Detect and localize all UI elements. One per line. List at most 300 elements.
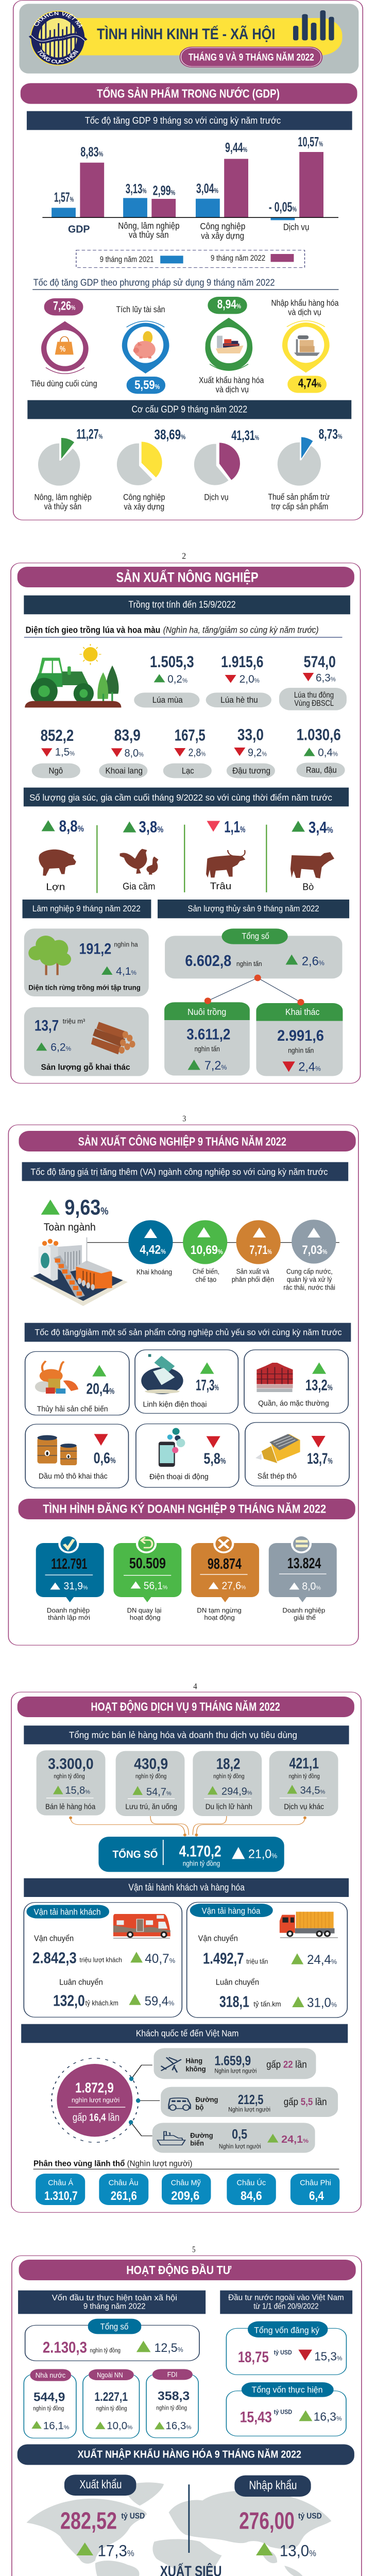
card: new enterprises: thành lập mới bbox=[48, 1614, 90, 1621]
card: freight transport: Vận tải hàng hóa bbox=[202, 1906, 261, 1916]
pie chart: industry share bbox=[117, 427, 186, 512]
card: total investment bbox=[25, 2319, 199, 2361]
stat: main-season rice bbox=[134, 653, 199, 707]
pie chart: taxes share: 8,73% bbox=[319, 427, 343, 442]
card: state sector bbox=[24, 2369, 76, 2438]
card: processed seafood bbox=[25, 1351, 129, 1415]
card: Africa bbox=[290, 2174, 339, 2205]
bar chart: GDP growth: Công nghiệp bbox=[200, 221, 245, 231]
ring: imports: 4,74% bbox=[298, 377, 321, 390]
card: returning enterprises: DN quay lại bbox=[127, 1607, 162, 1614]
icon: check mark bbox=[64, 1539, 74, 1548]
card: other services: 34,5% bbox=[300, 1785, 325, 1797]
stat: water and waste bbox=[283, 1219, 336, 1292]
callout: total visitors circle: nghìn lượt người bbox=[72, 2096, 119, 2104]
card: non-state sector: 10,0% bbox=[107, 2420, 132, 2432]
card: non-state sector: nghìn tỷ đồng bbox=[96, 2405, 127, 2412]
subheading: foreign investment: từ 1/1 đến 20/9/2022 bbox=[253, 2302, 319, 2311]
card: Americas bbox=[162, 2174, 211, 2205]
subheading: GDP structure: Cơ cấu GDP 9 tháng năm 2022 bbox=[132, 403, 247, 415]
card: by air: Nghìn lượt người bbox=[214, 2067, 257, 2075]
card: crude steel: 13,7% bbox=[307, 1450, 333, 1467]
card: travel: nghìn tỷ đồng bbox=[213, 1773, 245, 1780]
connector: fisheries tree bbox=[204, 975, 304, 1006]
ring: final consumption bbox=[30, 298, 97, 388]
stat: buffalo: Trâu bbox=[210, 881, 231, 891]
panel: industry bbox=[8, 1125, 358, 1645]
card: Europe: 261,6 bbox=[111, 2189, 137, 2203]
stat: peanut: 167,5 bbox=[175, 726, 206, 744]
icon: ship bbox=[158, 2131, 185, 2145]
stat: peanut: 2,8% bbox=[188, 746, 206, 758]
pie chart: services share: 41,31% bbox=[231, 428, 259, 443]
card: mobile phones: 5,8% bbox=[203, 1450, 226, 1467]
card: Australia bbox=[227, 2174, 276, 2205]
stat: peanut bbox=[163, 726, 212, 778]
card: by road: Nghìn lượt người bbox=[228, 2106, 270, 2113]
card: by sea: 24,1% bbox=[281, 2134, 309, 2145]
stat: manufacturing bbox=[183, 1220, 227, 1283]
card: freight transport: tỷ tấn.km bbox=[253, 2000, 281, 2008]
subheading: fisheries bbox=[158, 900, 349, 918]
bar chart: GDP growth: 2,99% bbox=[153, 183, 175, 198]
card: crude steel: Sắt thép thô bbox=[258, 1471, 297, 1480]
card: disbursed FDI: Tổng vốn thực hiện bbox=[252, 2385, 323, 2395]
page number 5: 5 bbox=[192, 2244, 196, 2255]
card: total fisheries: 2,6% bbox=[302, 955, 324, 968]
card: dissolved enterprises bbox=[269, 1534, 337, 1621]
card: accommodation bbox=[116, 1751, 184, 1816]
stat: corn bbox=[32, 726, 80, 778]
card: capture fisheries: 2,4% bbox=[298, 1060, 321, 1074]
icon: oil barrels bbox=[38, 1435, 77, 1465]
card: freight transport: 24,4% bbox=[307, 1953, 337, 1967]
card: disbursed FDI: 16,3% bbox=[314, 2410, 342, 2423]
card: passenger transport: 59,4% bbox=[145, 1994, 174, 2008]
stat: exports: 17,3% bbox=[98, 2542, 134, 2560]
icon: buffalo bbox=[206, 850, 245, 877]
legend: 9 tháng năm 2021 bbox=[100, 255, 154, 264]
bar chart: GDP growth: 10,57% bbox=[298, 134, 323, 149]
stat: pigs: Lợn bbox=[46, 882, 65, 892]
bar chart: GDP growth: 9,44% bbox=[225, 140, 247, 155]
card: passenger transport: Luân chuyển bbox=[59, 1978, 103, 1987]
card: accommodation: 430,9 bbox=[134, 1755, 168, 1772]
subheading: forestry: Lâm nghiệp 9 tháng năm 2022 bbox=[32, 904, 141, 913]
card: freight transport bbox=[187, 1902, 347, 2018]
card: other services: Dịch vụ khác bbox=[284, 1802, 324, 1811]
card: disbursed FDI: tỷ USD bbox=[274, 2409, 292, 2416]
stat: mining: 4,42% bbox=[140, 1243, 166, 1257]
stat: whole industry bbox=[41, 1195, 109, 1233]
card: passenger transport: Vận tải hành khách bbox=[34, 1908, 101, 1917]
text: sown area bbox=[24, 625, 342, 638]
stat: autumn-winter rice: Lúa thu đông bbox=[294, 690, 334, 699]
bar chart: GDP growth: 8,83% bbox=[80, 144, 103, 159]
card: FDI sector bbox=[146, 2369, 198, 2438]
card: accommodation: Lưu trú, ăn uống bbox=[125, 1802, 177, 1811]
heading: investment: HOẠT ĐỘNG ĐẦU TƯ bbox=[126, 2263, 231, 2277]
pie chart: agriculture share: 11,27% bbox=[76, 427, 103, 442]
icon: truck bbox=[280, 1912, 338, 1938]
card: total fisheries: nghìn tấn bbox=[236, 960, 262, 968]
card: returning enterprises: 50.509 bbox=[129, 1555, 166, 1572]
pie chart: services share: Dịch vụ bbox=[204, 493, 229, 502]
heading: agriculture bbox=[18, 567, 354, 587]
card: by air: 1.659,9 bbox=[214, 2053, 251, 2068]
card: passenger transport: triệu lượt khách bbox=[79, 1956, 122, 1964]
card: phone components: Linh kiện điện thoại bbox=[143, 1400, 207, 1409]
stat: sweet potato: Khoai lang bbox=[105, 767, 143, 776]
subheading: social investment bbox=[18, 2291, 206, 2314]
stat: summer-autumn rice bbox=[206, 653, 271, 707]
stat: exports: Xuất khẩu bbox=[79, 2478, 122, 2491]
text: by region: Phân theo vùng lãnh thổ bbox=[33, 2159, 125, 2168]
subheading: GDP growth bbox=[27, 111, 352, 130]
card: total fisheries: Tổng số bbox=[242, 932, 269, 941]
card: aquaculture bbox=[164, 1002, 250, 1076]
stat: sweet potato: 8,0% bbox=[124, 747, 144, 759]
card: crude oil: Dầu mỏ thô khai thác bbox=[39, 1471, 108, 1480]
stat: exports bbox=[60, 2475, 145, 2560]
card: total retail: 21,0% bbox=[248, 1848, 277, 1861]
card: by road: bộ bbox=[196, 2104, 203, 2111]
card: other services: nghìn tỷ đồng bbox=[289, 1773, 320, 1780]
card: retail goods: nghìn tỷ đồng bbox=[54, 1773, 85, 1780]
card: total investment: Tổng số bbox=[100, 2323, 128, 2332]
arrows: connectors to total bbox=[70, 1816, 306, 1836]
ring: exports: Xuất khẩu hàng hóa bbox=[199, 376, 264, 385]
card: timber: 6,2% bbox=[50, 1041, 71, 1053]
card: suspended enterprises: 27,6% bbox=[222, 1580, 246, 1591]
stat: summer-autumn rice: 1.915,6 bbox=[221, 653, 263, 671]
card: suspended enterprises bbox=[191, 1534, 259, 1621]
pie chart: services share bbox=[194, 428, 259, 502]
stat: main-season rice: 0,2% bbox=[167, 672, 187, 685]
ring: exports bbox=[199, 297, 264, 395]
card: FDI sector: FDI bbox=[167, 2370, 177, 2379]
stat: peanut: Lạc bbox=[182, 767, 194, 776]
stat: main-season rice: Lúa mùa bbox=[152, 696, 183, 705]
heading: trade bbox=[18, 2444, 354, 2465]
stat: summer-autumn rice: Lúa hè thu bbox=[220, 696, 258, 705]
card: disbursed FDI: 15,43 bbox=[240, 2409, 272, 2426]
subheading: social investment: 9 tháng năm 2022 bbox=[83, 2302, 146, 2311]
stat: water and waste: rác thải, nước thải bbox=[283, 1283, 335, 1292]
heading: agriculture: SẢN XUẤT NÔNG NGHIỆP bbox=[116, 569, 259, 585]
card: disbursed FDI bbox=[226, 2382, 346, 2436]
stat: main-season rice: 1.505,3 bbox=[150, 653, 194, 671]
pie chart: industry share: Công nghiệp bbox=[123, 493, 165, 502]
card: passenger transport: 2.842,3 bbox=[32, 1949, 77, 1967]
icon: pig bbox=[39, 850, 76, 876]
icon: statistics office logo bbox=[29, 10, 88, 66]
card: retail goods: 15,8% bbox=[65, 1785, 90, 1797]
icon: van bbox=[169, 2098, 191, 2110]
map: world bbox=[26, 2482, 331, 2576]
card: suspended enterprises: 98.874 bbox=[208, 1556, 242, 1572]
stat: summer-autumn rice: 2,0% bbox=[240, 672, 260, 685]
card: total investment: nghìn tỷ đồng bbox=[90, 2347, 121, 2354]
stat: autumn-winter rice: 6,3% bbox=[316, 671, 336, 684]
icon: piggy bank bbox=[133, 331, 156, 359]
icon: electronics bbox=[141, 1354, 183, 1394]
subheading: retail bbox=[24, 1725, 349, 1744]
stat: imports: 276,00 bbox=[239, 2507, 295, 2534]
card: by sea bbox=[152, 2123, 315, 2153]
stat: cattle: 3,4% bbox=[309, 819, 333, 837]
card: by air bbox=[154, 2048, 316, 2079]
card: dissolved enterprises: giải thể bbox=[294, 1614, 316, 1621]
ring: asset accumulation bbox=[116, 305, 169, 394]
stat: corn: Ngô bbox=[49, 767, 63, 776]
ring: exports: và dịch vụ bbox=[216, 385, 249, 395]
stat: poultry bbox=[120, 818, 163, 892]
card: freight transport: 318,1 bbox=[219, 1993, 249, 2010]
icon: container ship bbox=[216, 336, 244, 353]
card: state sector: 544,9 bbox=[33, 2391, 65, 2404]
icon: bus bbox=[113, 1914, 170, 1939]
card: registered FDI: 18,75 bbox=[238, 2348, 269, 2366]
card: freight transport: 1.492,7 bbox=[203, 1950, 244, 1967]
heading: investment bbox=[19, 2260, 356, 2280]
card: capture fisheries bbox=[256, 1003, 343, 1076]
subheading: crops: Trồng trọt tính đến 15/9/2022 bbox=[128, 599, 236, 609]
card: crude oil bbox=[25, 1424, 128, 1488]
stat: pigs: 8,8% bbox=[59, 817, 84, 835]
icon: cargo scale bbox=[294, 335, 320, 356]
card: freight transport: 31,0% bbox=[307, 1996, 337, 2010]
card: suspended enterprises: hoạt động bbox=[204, 1614, 235, 1621]
stat: autumn-winter rice: 574,0 bbox=[304, 653, 336, 671]
stat: cattle: Bò bbox=[302, 882, 314, 892]
card: non-state sector: Ngoài NN bbox=[97, 2371, 123, 2379]
card: total retail: TỔNG SỐ bbox=[113, 1848, 158, 1860]
card: aquaculture: Nuôi trồng bbox=[187, 1007, 226, 1017]
card: afforestation: 191,2 bbox=[79, 940, 111, 957]
card: dissolved enterprises: 13.824 bbox=[287, 1555, 321, 1572]
card: timber bbox=[24, 1007, 149, 1076]
card: by sea: Đường bbox=[190, 2131, 213, 2140]
bar chart: GDP growth: Dịch vụ bbox=[283, 222, 309, 232]
icon: rooster and duck bbox=[120, 849, 158, 875]
card: passenger transport: Vận chuyển bbox=[34, 1934, 74, 1943]
card: total retail: nghìn tỷ đồng bbox=[183, 1859, 220, 1868]
card: crude steel bbox=[245, 1422, 349, 1486]
subheading: transport: Vận tải hành khách và hàng hóa bbox=[128, 1882, 245, 1892]
card: processed seafood: Thủy hải sản chế biến bbox=[37, 1404, 108, 1413]
card: new enterprises bbox=[36, 1534, 104, 1621]
stat: vegetables: 1.030,6 bbox=[297, 726, 341, 744]
icon: plane bbox=[161, 2057, 181, 2073]
card: passenger transport bbox=[24, 1903, 182, 2017]
panel: agriculture bbox=[11, 563, 361, 1083]
card: new enterprises: 112.791 bbox=[51, 1556, 87, 1572]
icon: bars bbox=[293, 10, 334, 40]
card: phone components bbox=[135, 1350, 238, 1413]
card: total investment: 2.130,3 bbox=[43, 2338, 87, 2356]
icon: tractor bbox=[25, 644, 121, 707]
stat: autumn-winter rice bbox=[279, 653, 347, 710]
bar chart: GDP growth: 3,04% bbox=[196, 181, 218, 196]
page number 4: 4 bbox=[193, 1681, 197, 1691]
card: by air: Hàng bbox=[185, 2057, 202, 2065]
stat: imports bbox=[234, 2476, 322, 2560]
legend bbox=[76, 250, 304, 267]
card: total retail: 4.170,2 bbox=[179, 1842, 221, 1860]
card: by sea: biển bbox=[190, 2139, 204, 2147]
callout: total visitors circle: gấp 16,4 lần bbox=[73, 2112, 119, 2124]
card: retail goods: 3.300,0 bbox=[48, 1755, 94, 1772]
stat: electricity bbox=[232, 1220, 281, 1283]
stat: poultry: 3,8% bbox=[139, 818, 163, 836]
stat: whole industry: Toàn ngành bbox=[44, 1221, 96, 1233]
card: capture fisheries: nghìn tấn bbox=[288, 1046, 314, 1055]
icon: smartphone bbox=[159, 1428, 185, 1467]
card: Americas: 209,6 bbox=[171, 2189, 199, 2203]
page number 3: 3 bbox=[182, 1113, 186, 1124]
ring: final consumption: 7,26% bbox=[53, 299, 76, 313]
card: state sector: 16,1% bbox=[43, 2420, 69, 2432]
stat: cattle bbox=[290, 819, 334, 892]
card: timber: 13,7 bbox=[35, 1017, 59, 1034]
ring: asset accumulation: 5,59% bbox=[134, 378, 160, 392]
card: freight transport: triệu tấn bbox=[246, 1958, 268, 1965]
stat: buffalo bbox=[206, 818, 245, 891]
icon: equals sign bbox=[296, 1541, 308, 1546]
stat: mining bbox=[128, 1220, 173, 1276]
stat: soybean bbox=[227, 726, 275, 778]
card: Asia: 1.310,7 bbox=[44, 2189, 78, 2203]
stat: buffalo: 1,1% bbox=[224, 818, 245, 836]
heading: business registration bbox=[19, 1499, 355, 1519]
card: non-state sector bbox=[83, 2369, 139, 2438]
icon: cross bbox=[219, 1539, 229, 1548]
card: Europe: Châu Âu bbox=[109, 2178, 139, 2187]
icon: shopping bag: % bbox=[60, 344, 65, 353]
card: processed seafood: 20,4% bbox=[87, 1380, 115, 1397]
card: Australia: Châu Úc bbox=[237, 2178, 266, 2187]
card: mobile phones: Điện thoại di động bbox=[149, 1472, 209, 1481]
card: travel bbox=[193, 1751, 262, 1816]
stat: electricity: 7,71% bbox=[249, 1243, 272, 1257]
card: timber: Sản lượng gỗ khai thác bbox=[41, 1063, 130, 1072]
pie chart: taxes share: Thuế sản phẩm trừ bbox=[268, 493, 330, 502]
pie chart: agriculture share: và thủy sản bbox=[44, 502, 81, 511]
pie chart: taxes share: trợ cấp sản phẩm bbox=[271, 502, 328, 511]
card: accommodation: 54,7% bbox=[146, 1786, 172, 1798]
pie chart: industry share: và xây dựng bbox=[124, 502, 164, 512]
card: new enterprises: Doanh nghiệp bbox=[47, 1607, 90, 1614]
text: sown area: Diện tích gieo trồng lúa và hoa màu bbox=[26, 625, 160, 635]
card: retail goods bbox=[37, 1750, 105, 1816]
subheading: GDP structure bbox=[27, 400, 351, 419]
stat: sweet potato: 83,9 bbox=[114, 726, 141, 744]
card: passenger transport: 40,7% bbox=[145, 1952, 175, 1966]
icon: folded shirts bbox=[257, 1363, 293, 1392]
stat: autumn-winter rice: Vùng ĐBSCL bbox=[294, 699, 334, 707]
card: total investment: 12,5% bbox=[154, 2341, 183, 2355]
stat: exports: tỷ USD bbox=[121, 2512, 145, 2520]
card: travel: Du lịch lữ hành bbox=[206, 1802, 252, 1811]
card: by road: gấp 5,5 lần bbox=[284, 2096, 327, 2107]
stat: electricity: Sản xuất và bbox=[236, 1267, 269, 1276]
card: Europe bbox=[99, 2174, 148, 2205]
icon: factory bbox=[30, 1238, 128, 1306]
card: accommodation: nghìn tỷ đồng bbox=[135, 1773, 166, 1780]
card: phone components: 17,3% bbox=[196, 1376, 219, 1394]
card: returning enterprises bbox=[113, 1534, 181, 1621]
card: Australia: 84,6 bbox=[241, 2189, 262, 2203]
card: Asia: Châu Á bbox=[48, 2178, 74, 2187]
stat: mining: Khai khoáng bbox=[136, 1268, 172, 1276]
pie chart: agriculture share bbox=[34, 427, 103, 511]
card: non-state sector: 1.227,1 bbox=[94, 2390, 128, 2404]
icon: crab and cans bbox=[35, 1361, 78, 1394]
heading: services bbox=[18, 1697, 354, 1717]
card: by air: không bbox=[185, 2065, 206, 2073]
card: dissolved enterprises: Doanh nghiệp bbox=[282, 1607, 325, 1614]
subheading: international visitors: Khách quốc tế đến Việt Nam bbox=[136, 2029, 238, 2038]
card: other services bbox=[269, 1751, 338, 1816]
stat: water and waste: quản lý và xử lý bbox=[287, 1276, 332, 1283]
card: returning enterprises: hoạt động bbox=[130, 1614, 161, 1621]
card: new enterprises: 31,9% bbox=[64, 1580, 88, 1592]
stat: manufacturing: chế tạo bbox=[196, 1276, 216, 1283]
subheading: main products bbox=[25, 1323, 351, 1342]
connectors: visitor modes bbox=[129, 2065, 160, 2136]
card: passenger transport: tỷ khách.km bbox=[86, 1999, 118, 2007]
card: aquaculture: nghìn tấn bbox=[195, 1045, 220, 1053]
card: afforestation: 4,1% bbox=[116, 964, 136, 977]
stat: corn: 1,5% bbox=[55, 745, 75, 758]
stat: vegetables: Rau, đậu bbox=[306, 766, 337, 775]
ring: asset accumulation: Tích lũy tài sản bbox=[116, 305, 165, 314]
card: freight transport: Vận chuyển bbox=[198, 1934, 238, 1943]
card: passenger transport: 132,0 bbox=[53, 1991, 85, 2009]
subheading: forestry bbox=[23, 900, 151, 918]
bar chart: GDP growth: 1,57% bbox=[54, 190, 74, 205]
card: total fisheries: 6.602,8 bbox=[185, 952, 231, 970]
icon: cow bbox=[290, 852, 334, 878]
stat: manufacturing: Chế biến, bbox=[193, 1267, 219, 1276]
text: by region: (Nghìn lượt người) bbox=[127, 2159, 192, 2168]
heading: GDP bbox=[21, 83, 357, 104]
card: by sea: Nghìn lượt người bbox=[219, 2143, 261, 2150]
icon: return arrow bbox=[141, 1537, 152, 1548]
legend: 9 tháng năm 2022 bbox=[211, 253, 265, 262]
text: by region bbox=[33, 2159, 339, 2170]
panel: services bbox=[11, 1692, 361, 2212]
card: capture fisheries: Khai thác bbox=[285, 1007, 320, 1017]
icon: shopping bag bbox=[55, 336, 74, 354]
stat: sweet potato bbox=[99, 726, 147, 778]
card: returning enterprises: 56,1% bbox=[144, 1580, 167, 1591]
callout: total visitors circle: 1.872,9 bbox=[75, 2080, 114, 2096]
ring: exports: 8,94% bbox=[217, 298, 241, 311]
stat: whole industry: 9,63% bbox=[64, 1195, 109, 1219]
card: crude oil: 0,6% bbox=[94, 1449, 116, 1467]
card: afforestation: nghìn ha bbox=[114, 941, 138, 948]
subheading: foreign investment bbox=[220, 2291, 352, 2314]
card: registered FDI: tỷ USD bbox=[274, 2349, 292, 2356]
card: afforestation bbox=[24, 928, 149, 996]
subheading: livestock bbox=[24, 788, 349, 806]
icon: logs bbox=[91, 1022, 135, 1055]
panel: investment and trade bbox=[12, 2256, 362, 2576]
header banner bbox=[19, 4, 358, 74]
card: afforestation: Diện tích rừng trồng mới tập trung bbox=[28, 984, 141, 992]
